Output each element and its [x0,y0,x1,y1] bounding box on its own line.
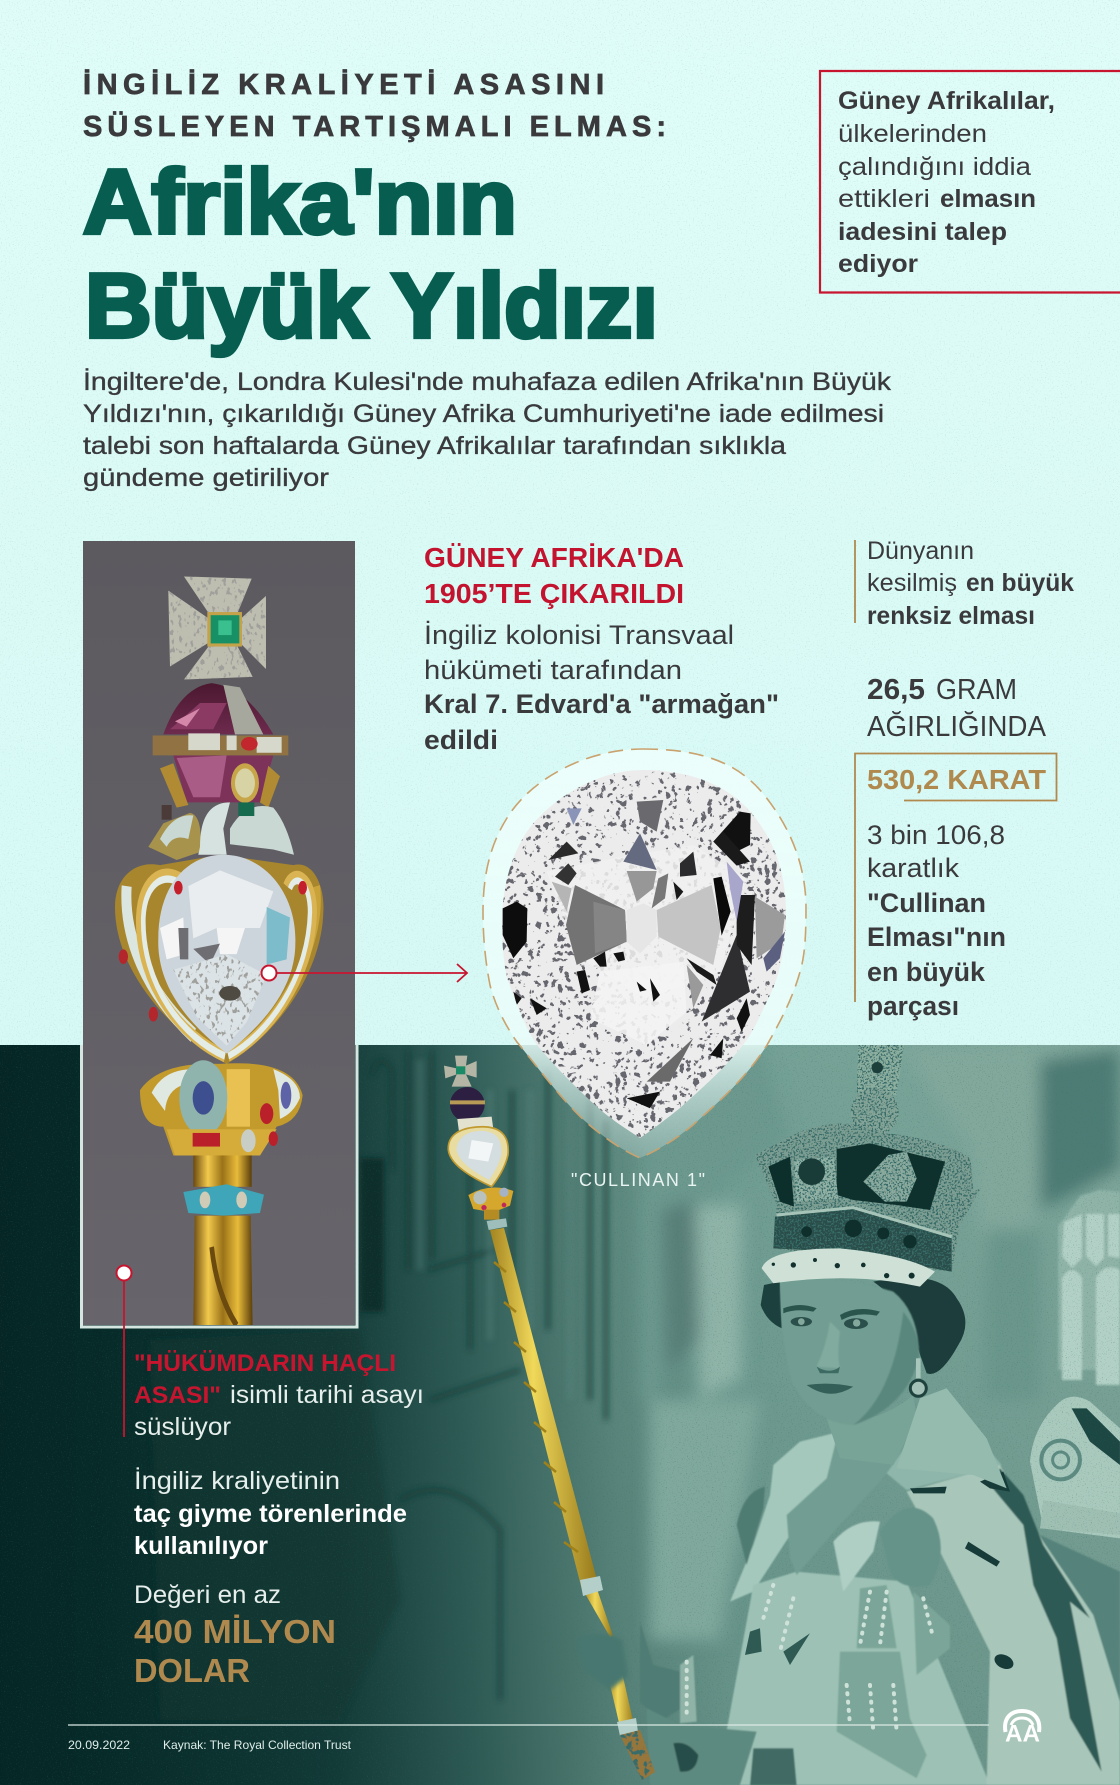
small diamond in frame [119,855,307,1053]
footer: date, source and rule: Kaynak: The Royal Collection Trust [163,1738,352,1752]
text block: largest piece of the Cullinan diamond: karatlık [867,853,960,883]
crown velvet [768,1143,945,1210]
gold shaft [183,1155,264,1328]
callout: South Africans demand return: iadesini talep [838,218,1007,246]
stat box: 530,2 carat [855,754,1056,1002]
text block: introduction paragraph: İngiltere'de, Londra Kulesi'nde muhafaza edilen Afrika'nın Büyük [83,367,892,396]
facial features [783,1305,926,1396]
sceptre head [444,1056,513,1230]
stat: weight in grams [867,674,1047,743]
connector: red line and arrow from sceptre diamond to Cullinan I [262,964,467,982]
text block: sceptre name: süslüyor [134,1413,231,1441]
cape ermine tails and gown jewels [687,1472,1016,1732]
neck [827,1395,917,1465]
connector: red line to sceptre name label [116,1266,132,1437]
hand [576,1634,628,1690]
panel: pale textured upper background [0,0,1120,1046]
text block: extracted in South Africa in 1905: edildi [424,725,498,755]
title: Afrika'nın Büyük Yıldızı [83,152,658,357]
crown cross and orb [851,1045,904,1136]
callout: South Africans demand return: elmasın [940,185,1036,213]
text block: sceptre name: "HÜKÜMDARIN HAÇLI [134,1350,396,1377]
shaft [490,1228,598,1590]
cullinan diamond halo with dashed outline [483,749,806,1158]
heading: kicker lines: İNGİLİZ KRALİYETİ ASASINI [83,69,604,101]
caption: Cullinan 1: "CULLINAN 1" [571,1170,705,1190]
text block: extracted in South Africa in 1905: hükümeti tarafından [424,655,682,685]
text block: world's largest colourless cut diamond: kesilmiş [867,569,957,597]
cross pattee [168,576,266,680]
crown frame [755,1123,981,1272]
footer: date, source and rule: 20.09.2022 [68,1738,130,1752]
text block: world's largest colourless cut diamond: renksiz elması [867,602,1035,630]
text block: sceptre name: isimli tarihi asayı [230,1381,424,1409]
text block: extracted in South Africa in 1905: 1905’TE ÇIKARILDI [424,578,684,609]
heart-shaped gold and enamel frame [115,855,323,1064]
text block: largest piece of the Cullinan diamond [867,820,1006,1021]
text block: largest piece of the Cullinan diamond: en büyük [867,957,986,987]
photo: sceptre close-up with white frame [82,541,357,1328]
illustration: Cullinan I pear-cut diamond [495,765,795,1145]
illustration: full crusader sceptre with twisted gold shaft [444,1056,655,1780]
heading: kicker lines: SÜSLEYEN TARTIŞMALI ELMAS: [83,110,666,143]
text block: largest piece of the Cullinan diamond: 3 bin 106,8 [867,820,1005,850]
stat: value at least 400 million dollars: Değeri en az [134,1581,281,1609]
stat: weight in grams: AĞIRLIĞINDA [867,710,1047,743]
panel: dark teal lower background with cathedral architecture [0,1045,1120,1785]
stat: value at least 400 million dollars [134,1581,336,1689]
stat: value at least 400 million dollars: DOLAR [134,1652,250,1689]
text block: introduction paragraph: gündeme getiriliyor [83,464,329,492]
callout: South Africans demand return [820,71,1120,292]
text block: introduction paragraph [83,367,892,492]
text block: used in coronation ceremonies: kullanılıyor [134,1532,268,1560]
text block: sceptre name: ASASI" [134,1382,221,1409]
text block: largest piece of the Cullinan diamond: "Cullinan [867,888,986,918]
callout: South Africans demand return: ediyor [838,250,918,278]
text block: introduction paragraph: Yıldızı'nın, çıkarıldığı Güney Afrika Cumhuriyeti'ne iade edilmesi [83,400,884,428]
text block: extracted in South Africa in 1905: GÜNEY AFRİKA'DA [424,542,684,573]
amethyst monde [153,683,288,808]
face [780,1278,919,1425]
callout: South Africans demand return: çalındığını iddia [838,153,1031,181]
stat box: 530,2 carat: 530,2 KARAT [867,764,1046,795]
heading: kicker lines [83,69,666,143]
footer: date, source and rule [68,1725,989,1752]
text block: sceptre name [134,1350,424,1441]
hair [761,1278,965,1374]
text block: extracted in South Africa in 1905: İngiliz kolonisi Transvaal [424,619,734,650]
text block: largest piece of the Cullinan diamond: parçası [867,991,959,1021]
collar [897,1388,1007,1488]
text block: used in coronation ceremonies [134,1466,407,1560]
lower gold knop with gems [140,1060,303,1155]
stat: value at least 400 million dollars: 400 MİLYON [134,1613,336,1650]
background carved scroll ornament [1030,1397,1120,1538]
illustration: queen's head with imperial state crown [755,1045,1007,1488]
text block: extracted in South Africa in 1905: Kral 7. Edvard'a "armağan" [424,689,779,719]
crown jewels [794,1152,917,1202]
illustration: queen's robe and gown [640,1392,1120,1785]
text block: used in coronation ceremonies: İngiliz kraliyetinin [134,1466,340,1495]
text block: introduction paragraph: talebi son haftalarda Güney Afrikalılar tarafından sıklıkla [83,432,786,460]
text block: world's largest colourless cut diamond: Dünyanın [867,537,974,565]
ermine trim [762,1248,935,1287]
stat: weight in grams: 26,5 [867,674,925,706]
text block: world's largest colourless cut diamond [855,537,1074,630]
logo: Anadolu Agency AA: AA [1005,1720,1040,1748]
crown band [773,1208,952,1272]
white enamel scrolls [148,802,294,860]
text block: world's largest colourless cut diamond: en büyük [966,569,1074,597]
title: Afrika'nın Büyük Yıldızı: Afrika'nın [83,152,517,253]
stat: weight in grams: GRAM [936,674,1017,706]
text block: extracted in South Africa in 1905 [424,542,779,755]
text block: used in coronation ceremonies: taç giyme törenlerinde [134,1500,407,1528]
callout: South Africans demand return: Güney Afrikalılar, [838,87,1055,115]
text block: largest piece of the Cullinan diamond: Elması"nın [867,922,1006,952]
title: Afrika'nın Büyük Yıldızı: Büyük Yıldızı [85,256,658,357]
callout: South Africans demand return: ettikleri [838,185,930,213]
callout: South Africans demand return: ülkelerinden [838,120,987,148]
background stone pillars and arches right [640,1045,1120,1640]
